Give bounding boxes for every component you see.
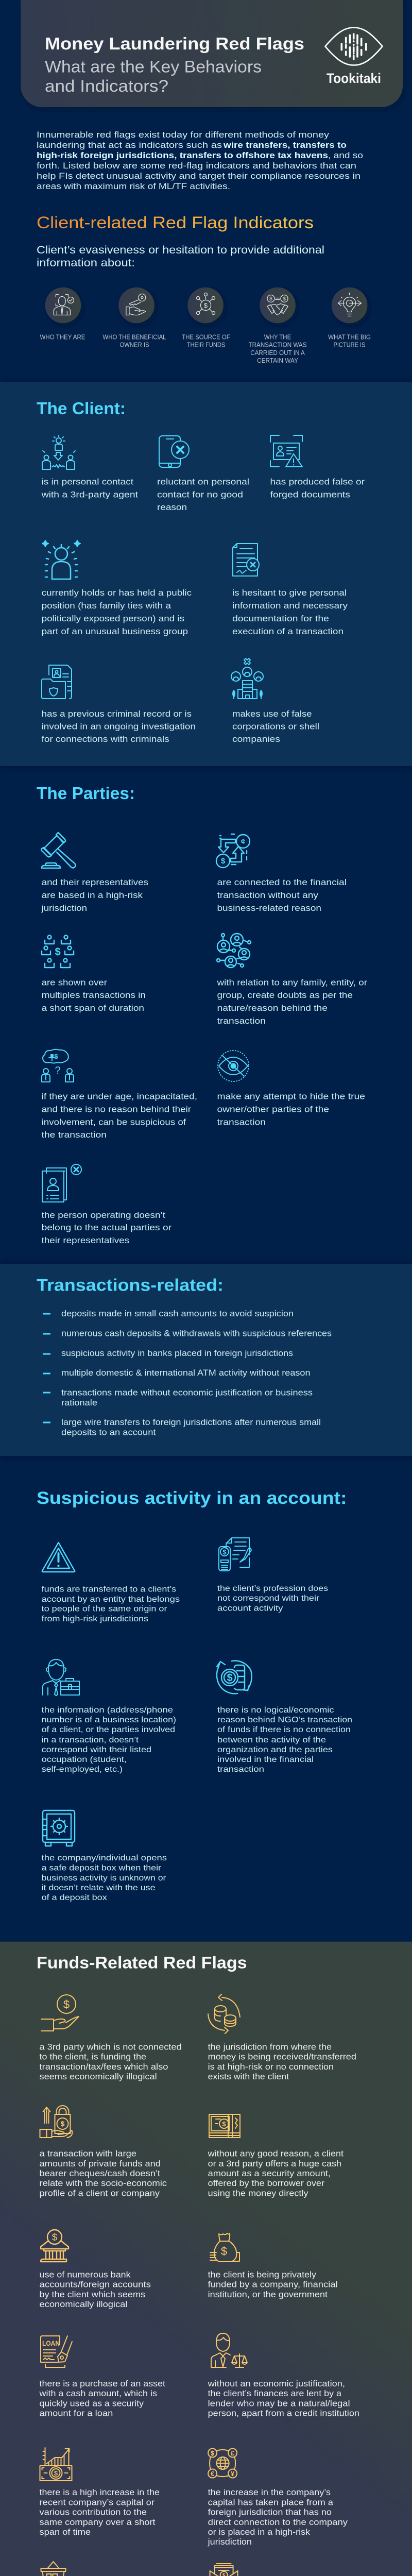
icon: criminal record folder bbox=[42, 665, 72, 699]
text: purchase: quickly used as a security bbox=[39, 2399, 144, 2408]
icon: hand with key bbox=[126, 294, 146, 315]
text: bank accounts bbox=[39, 2270, 151, 2309]
icon: person file with cross bbox=[42, 1164, 81, 1202]
item: why the transaction was carried out: CARRIED OUT IN A bbox=[250, 349, 305, 357]
icon: cash bundle bbox=[209, 2114, 240, 2138]
icon: handshake: $ bbox=[283, 296, 286, 302]
bullet list: suspicious activity in banks placed in foreign jurisdictions bbox=[61, 1348, 293, 1358]
icon: safe bbox=[43, 1810, 75, 1846]
heading: suspicious activity: Suspicious activity in an account: bbox=[37, 1488, 347, 1508]
icon: growth chart and cash: $ bbox=[54, 2469, 58, 2477]
text: shell companies: corporations or shell bbox=[232, 721, 319, 732]
title: Money Laundering Red Flags bbox=[45, 35, 304, 54]
text: funds transferred: from high-risk jurisdictions bbox=[42, 1615, 148, 1623]
text: hesitant: execution of a transaction bbox=[232, 626, 344, 636]
icon: currency exchange bbox=[216, 834, 250, 868]
icon: bank with coin bbox=[41, 2230, 68, 2262]
text: profession: account activity bbox=[217, 1604, 283, 1613]
text: foreign capital: capital has taken place from a bbox=[208, 2498, 334, 2507]
text: lender bbox=[207, 2379, 359, 2418]
text: security amount: amount as a security amount, bbox=[208, 2169, 331, 2178]
text: 3rd party: seems economically illogical bbox=[39, 2072, 157, 2081]
icon: thought cloud and people: ? bbox=[55, 1065, 61, 1076]
text: private funds bbox=[39, 2149, 167, 2198]
subtitle: and Indicators? bbox=[45, 77, 168, 95]
text: connected bbox=[217, 877, 347, 913]
icon: hand with coin bbox=[41, 1995, 79, 2031]
text: 3rd party: to the client, is funding the bbox=[39, 2053, 146, 2062]
item: who they are: WHO THEY ARE bbox=[40, 334, 85, 341]
text: information: number is of a business location) bbox=[42, 1716, 176, 1724]
text: privately funded: institution, or the government bbox=[208, 2290, 328, 2299]
text: under age: if they are under age, incapacitated, bbox=[42, 1091, 197, 1101]
text: deposit box: a safe deposit box when their bbox=[42, 1864, 162, 1873]
text: under age: and there is no reason behind their bbox=[42, 1105, 191, 1114]
icon: money bag bbox=[210, 2233, 239, 2262]
icon: public figure bbox=[42, 540, 80, 579]
text: profession: the client’s profession does bbox=[217, 1584, 328, 1593]
text: jurisdiction: the jurisdiction from where the bbox=[208, 2042, 332, 2052]
text: private funds: a transaction with large bbox=[39, 2149, 136, 2159]
text: funds transferred: funds are transferred to a client’s bbox=[42, 1585, 176, 1594]
text: foreign capital: the increase in the company’s bbox=[208, 2488, 331, 2497]
icon: calculator and document bbox=[219, 1538, 251, 1571]
intro paragraph: high-risk foreign jurisdictions, transfers to offshore tax havens bbox=[37, 151, 328, 160]
heading: client-related red flag indicators: Client-related Red Flag Indicators bbox=[37, 213, 314, 232]
text: purchase bbox=[39, 2379, 165, 2418]
text: multiple transactions: are shown over bbox=[42, 977, 107, 987]
text: 3rd party bbox=[39, 2042, 182, 2081]
icon: currency exchange: $ bbox=[221, 857, 226, 866]
bullet list: numerous cash deposits & withdrawals with suspicious references bbox=[61, 1328, 332, 1338]
lead text: information about: bbox=[37, 257, 135, 269]
text: under age: involvement, can be suspicious of bbox=[42, 1117, 186, 1127]
text: under age bbox=[42, 1091, 197, 1140]
icon: coins cycle: $ bbox=[227, 1672, 233, 1684]
heading: transactions-related: Transactions-related: bbox=[37, 1276, 224, 1294]
panel: header bbox=[21, 0, 403, 107]
text: multiple transactions bbox=[42, 977, 146, 1013]
text: NGO: involved in the financial bbox=[217, 1755, 314, 1764]
text: criminal record: involved in an ongoing investigation bbox=[42, 721, 196, 732]
icon: envelope with money bbox=[210, 2564, 238, 2576]
icon: bulb with dart bbox=[338, 293, 362, 316]
text: deposit box: the company/individual opens bbox=[42, 1854, 167, 1862]
icon: people around dollar bbox=[42, 936, 74, 968]
panel: the parties bbox=[37, 784, 367, 1245]
text: forged documents: has produced false or bbox=[270, 477, 365, 486]
text: purchase: there is a purchase of an asset bbox=[39, 2379, 165, 2388]
text: shell companies bbox=[232, 709, 319, 744]
bullet list: transactions made without economic justification or business bbox=[61, 1388, 313, 1398]
text: bank accounts: accounts/foreign accounts bbox=[39, 2280, 151, 2290]
icon: currency exchange: ¢ bbox=[241, 837, 245, 846]
text: lender: the client’s finances are lent by a bbox=[208, 2389, 342, 2398]
item: why the transaction was carried out: WHY THE bbox=[264, 334, 291, 341]
icon: loan document: LOAN bbox=[42, 2339, 60, 2347]
lead text bbox=[37, 244, 324, 269]
text: capital increase: recent company’s capital or bbox=[39, 2498, 155, 2507]
text: capital increase bbox=[39, 2488, 160, 2537]
text: NGO: of funds if there is no connection bbox=[217, 1725, 351, 1734]
icon: forged id bbox=[270, 435, 302, 467]
logo: Tookitaki bbox=[325, 28, 382, 86]
text: foreign capital: foreign jurisdiction that has no bbox=[208, 2508, 332, 2517]
item: what the big picture is: PICTURE IS bbox=[334, 341, 366, 348]
text: information: self-employed, etc.) bbox=[42, 1765, 123, 1774]
text: connected: are connected to the financial bbox=[217, 877, 347, 887]
text: capital increase: same company over a short bbox=[39, 2518, 156, 2527]
text: capital increase: span of time bbox=[39, 2528, 91, 2537]
text: representatives: are based in a high-risk bbox=[42, 890, 143, 900]
text: NGO bbox=[217, 1706, 352, 1774]
icon: bank with coin: $ bbox=[52, 2232, 58, 2243]
text: jurisdiction: is at high-risk or no connection bbox=[208, 2062, 334, 2072]
text: jurisdiction: exists with the client bbox=[208, 2072, 289, 2081]
text: person operating: the person operating doesn’t bbox=[42, 1210, 165, 1220]
text: funds transferred bbox=[42, 1585, 180, 1623]
text: connected: transaction without any bbox=[217, 890, 319, 900]
text: public position: currently holds or has held a public bbox=[42, 588, 192, 598]
icon: people around dollar: $ bbox=[55, 946, 61, 958]
heading: the client: The Client: bbox=[37, 399, 126, 418]
icon: family network bbox=[217, 934, 251, 968]
text: deposit box bbox=[42, 1854, 167, 1902]
text: person operating bbox=[42, 1210, 171, 1245]
item: who they are bbox=[40, 287, 85, 341]
item: the source of their funds bbox=[182, 287, 230, 348]
item: who the beneficial owner is: WHO THE BENEFICIAL bbox=[103, 334, 166, 341]
panel: transactions-related bbox=[0, 1264, 412, 1456]
text: information: correspond with their listed bbox=[42, 1745, 151, 1754]
text: information: of a client, or the parties involved bbox=[42, 1725, 175, 1734]
bullet list: multiple domestic & international ATM activity without reason bbox=[61, 1368, 310, 1378]
intro paragraph bbox=[37, 130, 363, 191]
panel: suspicious activity in an account bbox=[37, 1488, 352, 1902]
icon: hand with coin: $ bbox=[63, 1998, 70, 2011]
item: the source of their funds: THEIR FUNDS bbox=[187, 341, 225, 348]
text: public position bbox=[42, 588, 192, 636]
text: criminal record bbox=[42, 709, 196, 744]
text: private funds: profile of a client or company bbox=[39, 2189, 160, 2198]
text: security amount: without any good reason, a client bbox=[208, 2149, 344, 2159]
text: information: in a transaction, doesn’t bbox=[42, 1736, 139, 1744]
icon: globe and currencies: € bbox=[211, 2470, 214, 2478]
text: personal contact: is in personal contact bbox=[42, 477, 133, 486]
icon: thought cloud and people bbox=[42, 1049, 74, 1082]
text: reluctant: contact for no good bbox=[157, 489, 243, 499]
icon: globe and currencies bbox=[208, 2448, 237, 2478]
icon: calculator and document: $ bbox=[222, 1548, 227, 1556]
icon: growth chart and cash bbox=[40, 2448, 72, 2481]
icon: lawyer with scales bbox=[211, 2333, 247, 2367]
text: privately funded: funded by a company, financial bbox=[208, 2280, 338, 2290]
logo: Tookitaki: Tookitaki bbox=[327, 71, 381, 86]
icon: warning triangle bbox=[42, 1543, 75, 1572]
item: why the transaction was carried out: CERTAIN WAY bbox=[257, 357, 299, 364]
lead text: Client’s evasiveness or hesitation to provide additional bbox=[37, 244, 324, 256]
text: person operating: their representatives bbox=[42, 1235, 129, 1245]
text: representatives: jurisdiction bbox=[41, 903, 87, 913]
bullet list bbox=[43, 1309, 332, 1437]
text: deposit box: of a deposit box bbox=[42, 1893, 107, 1902]
bullet list: rationale bbox=[61, 1398, 97, 1408]
text: family entity: group, create doubts as per the bbox=[217, 990, 353, 1000]
icon: basket with dollar bbox=[41, 2562, 68, 2576]
text: capital increase: there is a high increase in the bbox=[39, 2488, 160, 2497]
text: security amount: or a 3rd party offers a huge cash bbox=[208, 2159, 341, 2168]
text: hesitant: information and necessary bbox=[232, 601, 348, 611]
icon: globe and currencies: ¥ bbox=[231, 2470, 235, 2478]
text: NGO: between the activity of the bbox=[217, 1736, 326, 1744]
item: who the beneficial owner is bbox=[103, 287, 166, 348]
text: shell companies: makes use of false bbox=[232, 709, 312, 719]
subtitle bbox=[45, 58, 262, 95]
bullet list: deposits to an account bbox=[61, 1427, 156, 1437]
text: deposit box: business activity is unknown or bbox=[42, 1874, 166, 1883]
icon: coins with arrows bbox=[208, 1994, 240, 2033]
icon: money bag: $ bbox=[221, 2245, 227, 2258]
bullet list: large wire transfers to foreign jurisdictions after numerous small bbox=[61, 1417, 321, 1427]
text: foreign capital: jurisdiction bbox=[208, 2537, 252, 2547]
text: privately funded: the client is being privately bbox=[208, 2270, 317, 2279]
text: connected: business-related reason bbox=[217, 903, 321, 913]
text: funds transferred: to people of the same origin or bbox=[42, 1605, 167, 1614]
icon: phone with cross bbox=[159, 436, 189, 467]
item: the source of their funds: THE SOURCE OF bbox=[182, 334, 230, 341]
text: family entity: nature/reason behind the bbox=[217, 1003, 328, 1013]
text: profession bbox=[217, 1584, 328, 1613]
text: under age: the transaction bbox=[42, 1130, 107, 1140]
text: representatives bbox=[41, 877, 148, 913]
text: family entity: with relation to any family, entity, or bbox=[216, 977, 367, 987]
text: hide owner: transaction bbox=[217, 1117, 266, 1127]
heading: the parties: The Parties: bbox=[37, 784, 135, 803]
text: public position: part of an unusual business group bbox=[42, 626, 188, 636]
text: reluctant: reluctant on personal bbox=[157, 477, 249, 486]
icon: globe and currencies: £ bbox=[231, 2449, 235, 2457]
text: multiple transactions: a short span of duration bbox=[42, 1003, 144, 1013]
icon: loan document bbox=[41, 2336, 72, 2367]
text: hesitant: documentation for the bbox=[232, 614, 329, 623]
icon: people and agent bbox=[42, 435, 75, 469]
text: NGO: reason behind NGO’s transaction bbox=[217, 1716, 352, 1724]
icon: lock and hand bbox=[40, 2106, 72, 2138]
text: information bbox=[42, 1706, 176, 1774]
subtitle: What are the Key Behaviors bbox=[45, 58, 262, 76]
text: NGO: transaction bbox=[217, 1765, 264, 1774]
text: hesitant bbox=[232, 588, 348, 636]
text: profession: not correspond with their bbox=[217, 1594, 320, 1603]
text: jurisdiction bbox=[208, 2042, 356, 2081]
icon: document with cross bbox=[233, 544, 259, 576]
text: person operating: belong to the actual parties or bbox=[42, 1223, 171, 1232]
text: representatives: and their representatives bbox=[42, 877, 148, 887]
icon: globe and currencies: $ bbox=[211, 2449, 215, 2457]
intro paragraph: , and so bbox=[328, 151, 363, 160]
icon: coins cycle bbox=[217, 1660, 252, 1693]
text: personal contact bbox=[41, 477, 138, 499]
text: public position: position (has family ties with a bbox=[42, 601, 171, 611]
text: purchase: with a cash amount, which is bbox=[39, 2389, 157, 2398]
text: reluctant: reason bbox=[157, 502, 187, 512]
text: personal contact: with a 3rd-party agent bbox=[41, 489, 138, 499]
text: information: the information (address/phone bbox=[42, 1706, 173, 1715]
bullet list: deposits made in small cash amounts to avoid suspicion bbox=[61, 1309, 294, 1318]
text: deposit box: it doesn’t relate with the use bbox=[42, 1884, 156, 1892]
text: funds transferred: account by an entity that belongs bbox=[42, 1595, 180, 1604]
item: what the big picture is bbox=[328, 287, 371, 348]
text: family entity bbox=[216, 977, 367, 1026]
text: 3rd party: transaction/tax/fees which also bbox=[39, 2062, 168, 2072]
text: foreign capital: or is placed in a high-risk bbox=[208, 2528, 311, 2537]
text: hide owner bbox=[217, 1091, 365, 1127]
text: lender: without an economic justification, bbox=[207, 2379, 345, 2388]
text: hide owner: owner/other parties of the bbox=[217, 1105, 329, 1114]
text: hesitant: is hesitant to give personal bbox=[232, 588, 347, 598]
icon: dollar network: $ bbox=[204, 302, 208, 309]
text: private funds: bearer cheques/cash doesn’t bbox=[39, 2169, 160, 2178]
intro paragraph: Innumerable red flags exist today for different methods of money bbox=[37, 130, 330, 140]
text: security amount bbox=[208, 2149, 344, 2198]
text: multiple transactions: multiples transactions in bbox=[42, 990, 146, 1000]
panel: the client bbox=[0, 382, 412, 766]
icon: handshake bbox=[267, 295, 288, 315]
text: security amount: using the money directly bbox=[208, 2189, 308, 2198]
icon: gavel bbox=[41, 833, 75, 868]
text: bank accounts: use of numerous bank bbox=[39, 2270, 131, 2279]
text: public position: politically exposed person) and is bbox=[42, 614, 184, 623]
text: security amount: offered by the borrower over bbox=[208, 2179, 325, 2188]
icon: thought cloud and people: $ bbox=[54, 1053, 58, 1060]
panel: funds-related red flags bbox=[0, 1942, 412, 2576]
text: criminal record: has a previous criminal record or is bbox=[42, 709, 192, 719]
text: NGO: there is no logical/economic bbox=[217, 1706, 334, 1715]
item: why the transaction was carried out bbox=[248, 287, 307, 364]
text: forged documents: forged documents bbox=[270, 489, 350, 499]
text: reluctant bbox=[157, 477, 249, 512]
text: forged documents bbox=[270, 477, 365, 499]
text: information: occupation (student, bbox=[42, 1755, 127, 1764]
text: private funds: amounts of private funds and bbox=[39, 2159, 161, 2168]
icon: shell companies bbox=[231, 658, 263, 699]
text: criminal record: for connections with criminals bbox=[42, 734, 169, 744]
text: lender: person, apart from a credit institution bbox=[208, 2409, 359, 2418]
text: bank accounts: economically illogical bbox=[39, 2300, 127, 2309]
text: purchase: amount for a loan bbox=[39, 2409, 113, 2418]
text: capital increase: various contribution to the bbox=[39, 2508, 147, 2517]
icon: handshake: $ bbox=[269, 296, 272, 302]
text: privately funded bbox=[208, 2270, 338, 2299]
icon: person with check bbox=[54, 295, 74, 315]
text: private funds: relate with the socio-economic bbox=[39, 2179, 167, 2188]
icon: man with briefcase bbox=[43, 1659, 79, 1696]
item: who the beneficial owner is: OWNER IS bbox=[119, 341, 149, 348]
text: jurisdiction: money is being received/transferred bbox=[208, 2053, 356, 2062]
intro paragraph: laundering that act as indicators such as bbox=[37, 141, 222, 150]
text: NGO: organization and the parties bbox=[217, 1745, 333, 1754]
icon: hidden eye bbox=[218, 1050, 249, 1081]
text: family entity: transaction bbox=[217, 1016, 266, 1026]
text: 3rd party: a 3rd party which is not connected bbox=[39, 2042, 182, 2052]
icon: cash bundle: $ bbox=[222, 2120, 226, 2128]
text: hide owner: make any attempt to hide the true bbox=[217, 1091, 365, 1101]
item: why the transaction was carried out: TRANSACTION WAS bbox=[248, 341, 307, 348]
item: what the big picture is: WHAT THE BIG bbox=[328, 334, 371, 341]
text: shell companies: companies bbox=[232, 734, 280, 744]
icon: lock and hand: $ bbox=[61, 2120, 65, 2128]
heading: funds-related: Funds-Related Red Flags bbox=[37, 1954, 247, 1972]
text: foreign capital bbox=[208, 2488, 348, 2547]
intro paragraph: areas with maximum risk of ML/TF activities. bbox=[37, 182, 230, 191]
intro paragraph: forth. Listed below are some red-flag indicators and behaviors that can bbox=[37, 161, 356, 171]
intro paragraph: wire transfers, transfers to bbox=[223, 141, 347, 150]
intro paragraph: help FIs detect unusual activity and target their compliance resources in bbox=[37, 172, 360, 181]
text: lender: lender who may be a natural/legal bbox=[208, 2399, 350, 2408]
text: foreign capital: direct connection to the company bbox=[208, 2518, 348, 2527]
text: bank accounts: by the client which seems bbox=[39, 2290, 145, 2299]
